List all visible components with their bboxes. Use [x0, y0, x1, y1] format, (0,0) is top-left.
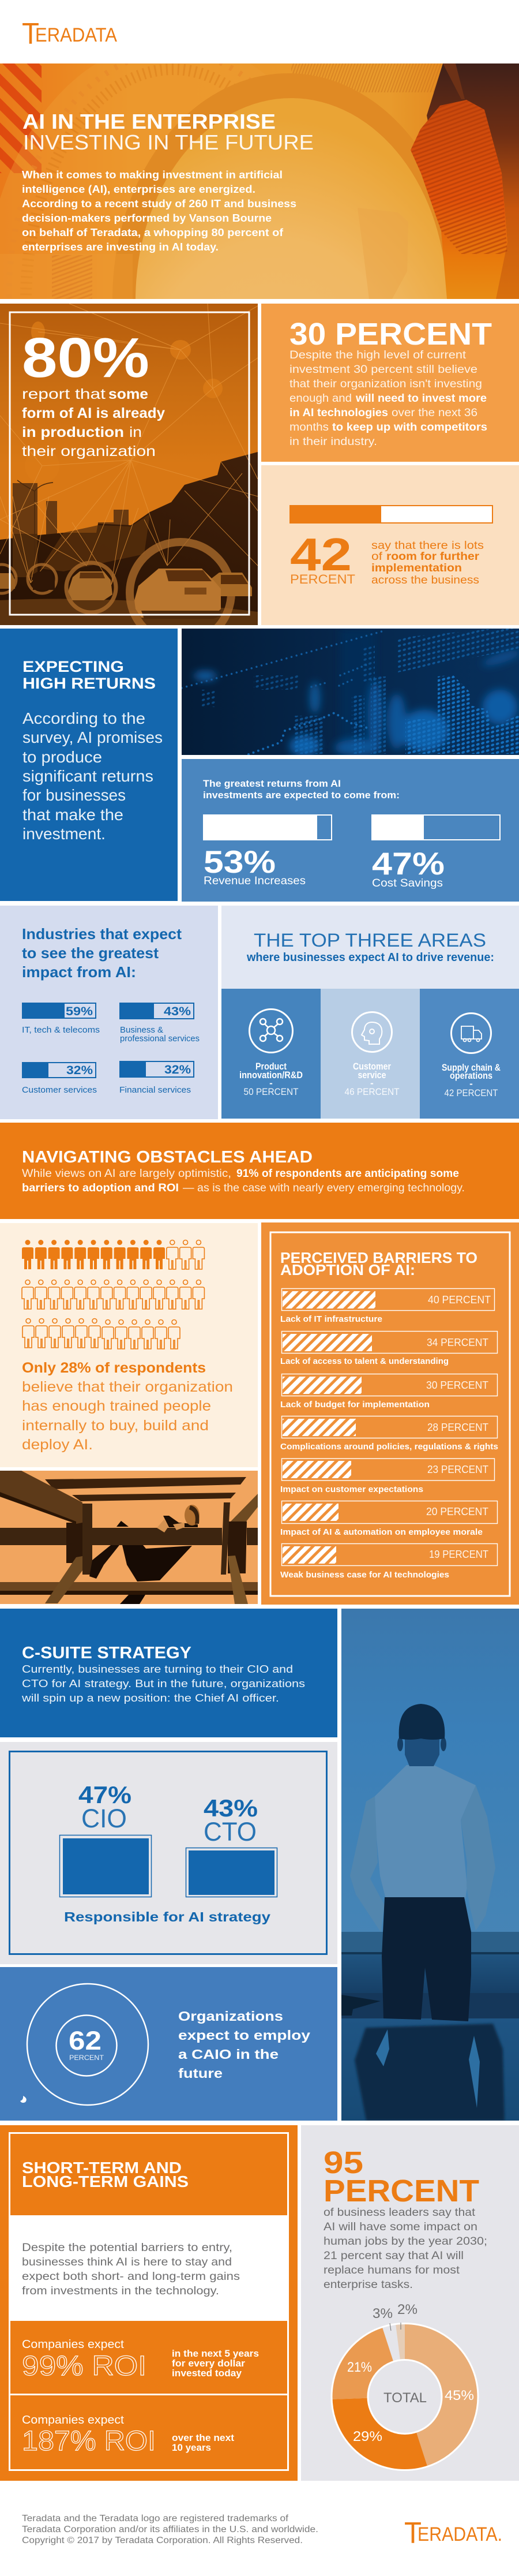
ring chart: 62: [69, 2026, 101, 2055]
photo: man looking out window: [341, 1609, 519, 2121]
30 percent body: over the next 36: [392, 406, 477, 419]
barrier: talent: 34 PERCENT: [427, 1337, 488, 1348]
heading: to see the greatest: [22, 944, 159, 962]
progress bar 42 percent: [289, 505, 492, 524]
people icons row 3: [22, 1318, 180, 1349]
barrier: IT infrastructure: [280, 1288, 495, 1324]
80 percent caption: their organization: [22, 443, 156, 459]
body: Despite the potential barriers to entry,: [22, 2241, 232, 2254]
heading: [22, 925, 182, 981]
hero intro text: According to a recent study of 260 IT and business: [22, 197, 296, 210]
intro: [203, 779, 400, 801]
80 percent caption: report that: [22, 386, 106, 402]
caption: [22, 1360, 233, 1453]
80 percent caption: in production: [22, 424, 124, 440]
42 percent caption: say that there is lots: [371, 539, 484, 552]
body: enterprise tasks.: [324, 2278, 413, 2291]
label: -: [269, 1078, 273, 1089]
heading: PERCEIVED BARRIERS TO: [280, 1249, 477, 1266]
30 percent body: enough and: [289, 392, 352, 405]
icon: truck: [451, 1014, 491, 1053]
80 percent caption: in: [129, 424, 142, 440]
photo: blue digital market chart: [182, 626, 519, 756]
42 percent caption: of: [371, 550, 383, 563]
column: supply chain: [420, 989, 519, 1119]
hero title: INVESTING IN THE FUTURE: [23, 130, 314, 154]
body: 21 percent say that AI will: [324, 2249, 464, 2262]
stat: 187 percent ROI: Companies expect: [22, 2414, 124, 2427]
hero intro text: on behalf of Teradata, a whopping 80 percent of: [22, 226, 284, 238]
donut chart: 21%: [347, 2360, 372, 2375]
body: of business leaders say that: [324, 2206, 476, 2219]
panel: 80 percent photo: [0, 304, 258, 644]
body: from investments in the technology.: [22, 2285, 219, 2297]
panel: 30 percent: [261, 304, 519, 462]
hero intro text: When it comes to making investment in artificial: [22, 169, 283, 181]
stat: 47 percent: Cost Savings: [372, 877, 443, 889]
panel: 62 percent CAIO: [0, 1967, 337, 2121]
30 percent body: in AI technologies: [289, 406, 388, 419]
42 percent caption: room for further: [386, 550, 479, 563]
stat: 53 percent: Revenue Increases: [204, 875, 306, 887]
number 42 percent: PERCENT: [290, 572, 355, 586]
body: — as is the case with nearly every emerging technology.: [183, 1182, 465, 1194]
panel: top three areas: [221, 906, 519, 1119]
body: CTO for AI strategy. But in the future, organizations: [22, 1678, 305, 1689]
logo: Teradata footer: [404, 2517, 502, 2550]
hero intro text: enterprises are investing in AI today.: [22, 241, 219, 253]
bar: business: [119, 1003, 194, 1019]
barrier: employee morale: Impact of AI & automation on employee morale: [280, 1528, 483, 1537]
chart caption: Responsible for AI strategy: [64, 1909, 270, 1924]
heading: EXPECTING: [22, 658, 124, 675]
bar labels: Customer services: [22, 1085, 97, 1095]
barrier: IT infrastructure: 40 PERCENT: [428, 1294, 491, 1306]
label: [345, 1061, 399, 1097]
stat: 53 percent: 53%: [204, 844, 276, 880]
heading: C-SUITE STRATEGY: [22, 1644, 191, 1662]
white frame: [10, 312, 249, 615]
30 percent body: will need to invest more: [355, 392, 487, 405]
big number 80%: 80%: [22, 326, 149, 389]
footer legal text: Teradata Corporation and/or its affiliates in the U.S. and worldwide.: [22, 2525, 318, 2534]
body: [22, 2241, 240, 2297]
panel: industries: [0, 906, 218, 1119]
body: survey, AI promises: [22, 728, 163, 746]
hero title: [22, 110, 314, 154]
bar: CTO: [186, 1794, 277, 1897]
body: businesses think AI is here to stay and: [22, 2256, 232, 2268]
barrier: talent: [280, 1331, 497, 1366]
panel: 42 percent: [261, 465, 519, 625]
caption: believe that their organization: [22, 1379, 233, 1395]
caption: [178, 2009, 310, 2081]
panel: perceived barriers: [261, 1222, 519, 1605]
hero intro text: decision-makers performed by Vanson Bourne: [22, 212, 272, 224]
heading: where businesses expect AI to drive revenue:: [246, 951, 494, 964]
barrier: policies: Complications around policies, regulations & rights: [280, 1442, 498, 1452]
body: expect both short- and long-term gains: [22, 2270, 240, 2283]
bar: CIO: 47%: [78, 1781, 131, 1808]
barrier: customer expectations: [280, 1459, 495, 1494]
80 percent caption: some: [108, 386, 148, 402]
icon: network: [249, 1009, 293, 1053]
people icons row 2: [22, 1280, 204, 1309]
barrier: IT infrastructure: Lack of IT infrastructure: [280, 1315, 382, 1324]
people icons row 1: [22, 1240, 204, 1269]
heading: LONG-TERM GAINS: [22, 2173, 189, 2190]
bar: IT: 59%: [66, 1005, 93, 1018]
heading: [280, 1249, 477, 1278]
heading: 95: [324, 2145, 363, 2180]
barrier: talent: Lack of access to talent & understanding: [280, 1357, 449, 1366]
caption: internally to buy, build and: [22, 1418, 209, 1434]
panel: short-term and long-term gains: [0, 2125, 298, 2481]
body: significant returns: [22, 767, 153, 785]
body: for businesses: [22, 786, 126, 804]
bar: CIO: CIO: [81, 1804, 127, 1833]
caption: future: [178, 2066, 223, 2081]
stat: 99 percent ROI: invested today: [172, 2368, 242, 2379]
42 percent caption: across the business: [371, 574, 479, 586]
barrier: budget: Lack of budget for implementation: [280, 1400, 430, 1409]
label: 50 PERCENT: [243, 1086, 299, 1097]
logo: Teradata footer: T: [404, 2517, 422, 2550]
stat: 187 percent ROI: [22, 2414, 234, 2457]
stat: 187 percent ROI: 10 years: [172, 2442, 211, 2453]
stat: 53 percent: [204, 844, 306, 887]
body: Currently, businesses are turning to their CIO and: [22, 1663, 293, 1675]
heading: Industries that expect: [22, 925, 182, 943]
column: customer service: [321, 989, 420, 1119]
barrier: customer expectations: 23 PERCENT: [427, 1464, 488, 1475]
30 percent body: investment 30 percent still believe: [289, 363, 477, 376]
panel: c-suite strategy: [0, 1609, 337, 1737]
bar labels: [22, 1025, 200, 1095]
panel: navigating obstacles: [0, 1123, 519, 1219]
heading: HIGH RETURNS: [22, 675, 156, 692]
body: to produce: [22, 748, 102, 766]
label: Customer: [353, 1061, 391, 1072]
barrier: weak business case: Weak business case for AI technologies: [280, 1571, 449, 1580]
body: [21, 1663, 305, 1704]
ring chart: PERCENT: [69, 2054, 104, 2062]
stat: 187 percent ROI: over the next: [172, 2432, 234, 2443]
barrier: customer expectations: Impact on customer expectations: [280, 1485, 423, 1494]
panel: expecting high returns: [0, 629, 178, 901]
30 percent heading: 30 PERCENT: [289, 317, 492, 352]
heading: [22, 658, 156, 692]
body: [324, 2206, 487, 2291]
heading: NAVIGATING OBSTACLES AHEAD: [22, 1148, 313, 1167]
label: innovation/R&D: [239, 1070, 303, 1081]
stat: 187 percent ROI: 187% ROI: [22, 2426, 156, 2457]
heading: THE TOP THREE AREAS: [254, 930, 486, 951]
30 percent body: that their organization isn't investing: [289, 377, 482, 390]
caption: deploy AI.: [22, 1437, 93, 1453]
barrier: budget: [280, 1374, 497, 1409]
caption: Only 28% of respondents: [22, 1360, 206, 1376]
body: AI will have some impact on: [324, 2220, 477, 2233]
stat: 47 percent: 47%: [372, 846, 445, 881]
bar labels: Business &: [120, 1025, 163, 1035]
label: 46 PERCENT: [345, 1086, 399, 1097]
caption: a CAIO in the: [178, 2047, 279, 2062]
ring chart: [20, 1984, 148, 2105]
label: operations: [450, 1070, 492, 1081]
heading: [22, 2159, 189, 2190]
body: According to the: [22, 709, 145, 727]
panel: responsible for AI strategy: [0, 1742, 337, 1964]
bar: cost savings: [371, 814, 500, 840]
label: -: [370, 1078, 374, 1089]
donut chart: 2%: [397, 2302, 418, 2317]
body: that make the: [22, 806, 123, 824]
logo: Teradata header: T: [22, 17, 39, 51]
heading: PERCENT: [324, 2174, 479, 2208]
number 42 percent: 42: [290, 529, 352, 580]
panel: 95 percent: [301, 2125, 519, 2481]
stat: 99 percent ROI: for every dollar: [172, 2358, 245, 2369]
label: Product: [255, 1061, 287, 1072]
80 percent caption: [22, 386, 165, 459]
bar labels: IT, tech & telecoms: [22, 1025, 100, 1035]
barrier: policies: [280, 1416, 498, 1452]
caption: expect to employ: [178, 2028, 310, 2043]
barrier: weak business case: [280, 1543, 497, 1580]
42 percent caption: [371, 539, 484, 586]
donut chart: 29%: [353, 2429, 382, 2444]
stat: 99 percent ROI: [22, 2338, 259, 2381]
bar labels: Financial services: [119, 1085, 191, 1095]
label: [442, 1062, 501, 1098]
logo: Teradata footer: ERADATA.: [418, 2523, 502, 2545]
label: [239, 1061, 303, 1097]
bar: customer: 32%: [66, 1064, 93, 1077]
bar: IT: [22, 1003, 96, 1019]
heading: [246, 930, 494, 964]
heading: SHORT-TERM AND: [22, 2159, 182, 2177]
footer legal text: [22, 2514, 318, 2545]
30 percent body: to keep up with competitors: [332, 421, 487, 433]
donut chart: [332, 2302, 478, 2470]
bar labels: professional services: [120, 1034, 200, 1044]
bar: customer: [22, 1062, 96, 1078]
donut chart: 3%: [373, 2306, 393, 2321]
intro: The greatest returns from AI: [203, 779, 341, 789]
body: While views on AI are largely optimistic,: [22, 1167, 231, 1180]
donut chart: 45%: [445, 2388, 474, 2403]
bar: financial: 32%: [164, 1063, 191, 1076]
body: barriers to adoption and ROI: [22, 1182, 179, 1194]
logo: Teradata header: ERADATA: [35, 24, 117, 46]
bar: CIO: [60, 1781, 151, 1897]
logo: Teradata header: [22, 17, 117, 51]
column: product innovation: [221, 989, 321, 1119]
bar: CTO: CTO: [204, 1817, 257, 1846]
bar: revenue increases: [203, 814, 332, 840]
30 percent body: Despite the high level of current: [289, 349, 467, 361]
barrier: budget: 30 PERCENT: [426, 1379, 488, 1391]
body: 91% of respondents are anticipating some: [236, 1167, 459, 1180]
stat: 99 percent ROI: Companies expect: [22, 2338, 124, 2351]
body: [22, 709, 163, 843]
body: human jobs by the year 2030;: [324, 2235, 487, 2248]
body: will spin up a new position: the Chief AI officer.: [21, 1692, 279, 1704]
photo: person climbing wooden frame: [0, 1471, 258, 1604]
bar: financial: [119, 1061, 194, 1078]
heading: [324, 2145, 479, 2208]
caption: Organizations: [178, 2009, 283, 2024]
barrier: employee morale: [280, 1501, 497, 1537]
icon: headset: [352, 1012, 392, 1052]
panel: hero: [0, 63, 519, 299]
stat: 99 percent ROI: 99% ROI: [22, 2351, 146, 2381]
hero intro text: [22, 169, 296, 253]
donut chart: TOTAL: [383, 2390, 427, 2406]
hero intro text: intelligence (AI), enterprises are energized.: [22, 183, 255, 195]
barrier: policies: 28 PERCENT: [427, 1422, 488, 1433]
barrier: employee morale: 20 PERCENT: [426, 1506, 488, 1517]
intro: investments are expected to come from:: [203, 790, 400, 801]
bar: CTO: 43%: [204, 1794, 258, 1822]
footer legal text: Copyright © 2017 by Teradata Corporation. All Rights Reserved.: [22, 2536, 303, 2545]
body: investment.: [22, 825, 106, 843]
hero title: AI IN THE ENTERPRISE: [22, 110, 276, 133]
42 percent caption: implementation: [371, 562, 462, 574]
label: Supply chain &: [442, 1062, 501, 1073]
stat: 99 percent ROI: in the next 5 years: [172, 2348, 259, 2359]
heading: ADOPTION OF AI:: [280, 1261, 415, 1278]
body: replace humans for most: [324, 2264, 460, 2276]
30 percent body: [289, 349, 487, 448]
30 percent body: months: [289, 421, 329, 433]
80 percent caption: form of AI is already: [22, 405, 165, 421]
heading: impact from AI:: [22, 963, 136, 981]
footer legal text: Teradata and the Teradata logo are registered trademarks of: [22, 2514, 289, 2523]
label: 42 PERCENT: [444, 1087, 498, 1098]
bar: business: 43%: [164, 1005, 191, 1018]
panel: greatest returns: [182, 759, 519, 902]
panel: 28 percent trained people: [0, 1223, 258, 1467]
body: [22, 1167, 465, 1194]
label: -: [469, 1078, 473, 1089]
barrier: weak business case: 19 PERCENT: [429, 1549, 488, 1560]
30 percent body: in their industry.: [289, 435, 377, 448]
caption: has enough trained people: [22, 1398, 211, 1414]
label: service: [358, 1070, 386, 1081]
